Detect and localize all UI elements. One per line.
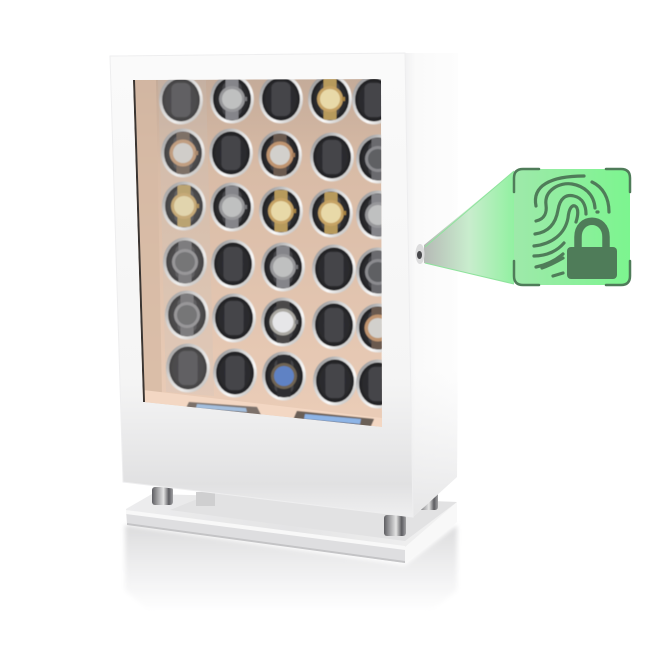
- row 1 winders: [159, 79, 382, 125]
- fingerprint: [534, 176, 609, 276]
- row 6 winders: [166, 344, 400, 408]
- glass window with winders: [133, 74, 400, 428]
- row 3 winders: [162, 182, 400, 240]
- row 4 winders: [163, 238, 400, 296]
- lock sensor: [416, 244, 424, 264]
- right control display: [293, 411, 374, 428]
- fingerprint beam: [424, 171, 514, 284]
- scan corner brackets: [514, 169, 630, 285]
- padlock: [567, 221, 617, 279]
- fingerprint lock panel: [514, 169, 630, 285]
- cabinet side panel: [405, 53, 458, 517]
- row 5 winders: [165, 290, 400, 352]
- left column glass haze: [162, 80, 210, 392]
- left control display: [185, 402, 261, 415]
- window backing: [133, 79, 382, 427]
- base plinth: [126, 492, 457, 563]
- row 2 winders: [161, 128, 400, 184]
- cabinet front: [110, 53, 413, 517]
- green panel: [514, 169, 630, 285]
- beam edges: [425, 171, 514, 284]
- steel feet: [152, 487, 438, 536]
- floor reflection: [125, 525, 457, 612]
